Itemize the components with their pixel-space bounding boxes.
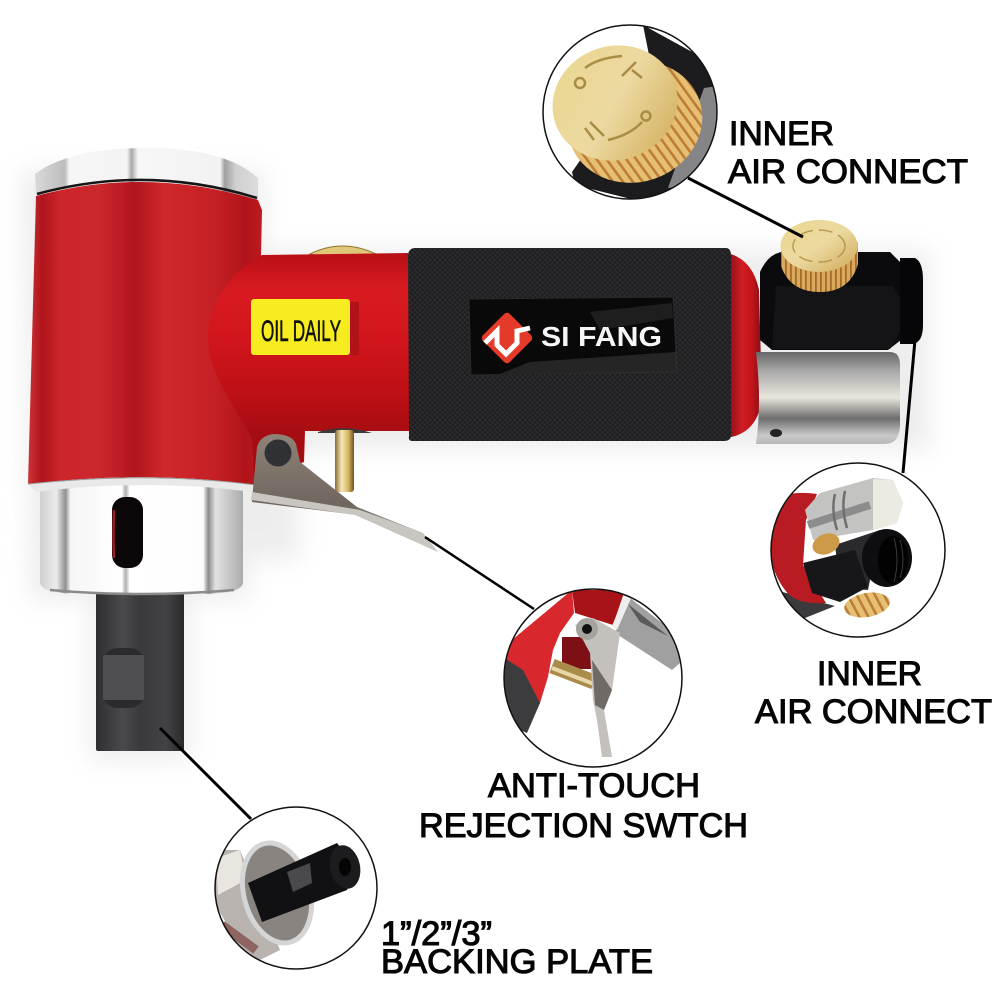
label: anti-touch rejection switch: REJECTION SWTCH <box>419 807 748 845</box>
brass knob <box>780 220 858 292</box>
red collar <box>722 252 762 438</box>
red neck <box>208 253 411 480</box>
silver tube <box>756 352 900 444</box>
detail circle: backing plate shaft <box>213 807 377 969</box>
connector lines <box>160 178 915 819</box>
air sander tool <box>28 148 923 751</box>
shaft <box>96 585 184 751</box>
label: anti-touch rejection switch <box>419 767 748 845</box>
rubber grip <box>408 248 731 441</box>
soft product shadow <box>22 170 930 760</box>
detail circle: brass knob <box>537 25 725 205</box>
black hex fitting <box>760 252 923 350</box>
oil daily label: OIL DAILY <box>261 315 341 348</box>
label: top inner air connect <box>728 115 968 191</box>
label: anti-touch rejection switch: ANTI-TOUCH <box>488 767 700 805</box>
label: backing plate <box>381 915 653 981</box>
oil daily label <box>251 299 359 355</box>
brand plate: SI FANG <box>541 321 662 352</box>
brand plate <box>469 297 677 375</box>
label: backing plate: BACKING PLATE <box>381 943 653 981</box>
trigger lever <box>251 434 438 552</box>
label: top inner air connect: INNER <box>729 115 834 153</box>
label: right inner air connect: INNER <box>817 655 922 693</box>
red cylinder body <box>28 182 262 492</box>
detail circle: air inlet <box>770 463 945 637</box>
silver lower ring <box>40 484 243 594</box>
detail circle: trigger switch <box>495 589 682 767</box>
top cap <box>35 148 258 200</box>
label: backing plate: 1”/2”/3” <box>381 915 492 953</box>
label: top inner air connect: AIR CONNECT <box>728 153 968 191</box>
logo diamond <box>480 311 534 365</box>
label: right inner air connect <box>755 655 992 731</box>
gold dome screw <box>310 246 376 258</box>
label: right inner air connect: AIR CONNECT <box>755 693 992 731</box>
brass pin <box>318 428 372 492</box>
